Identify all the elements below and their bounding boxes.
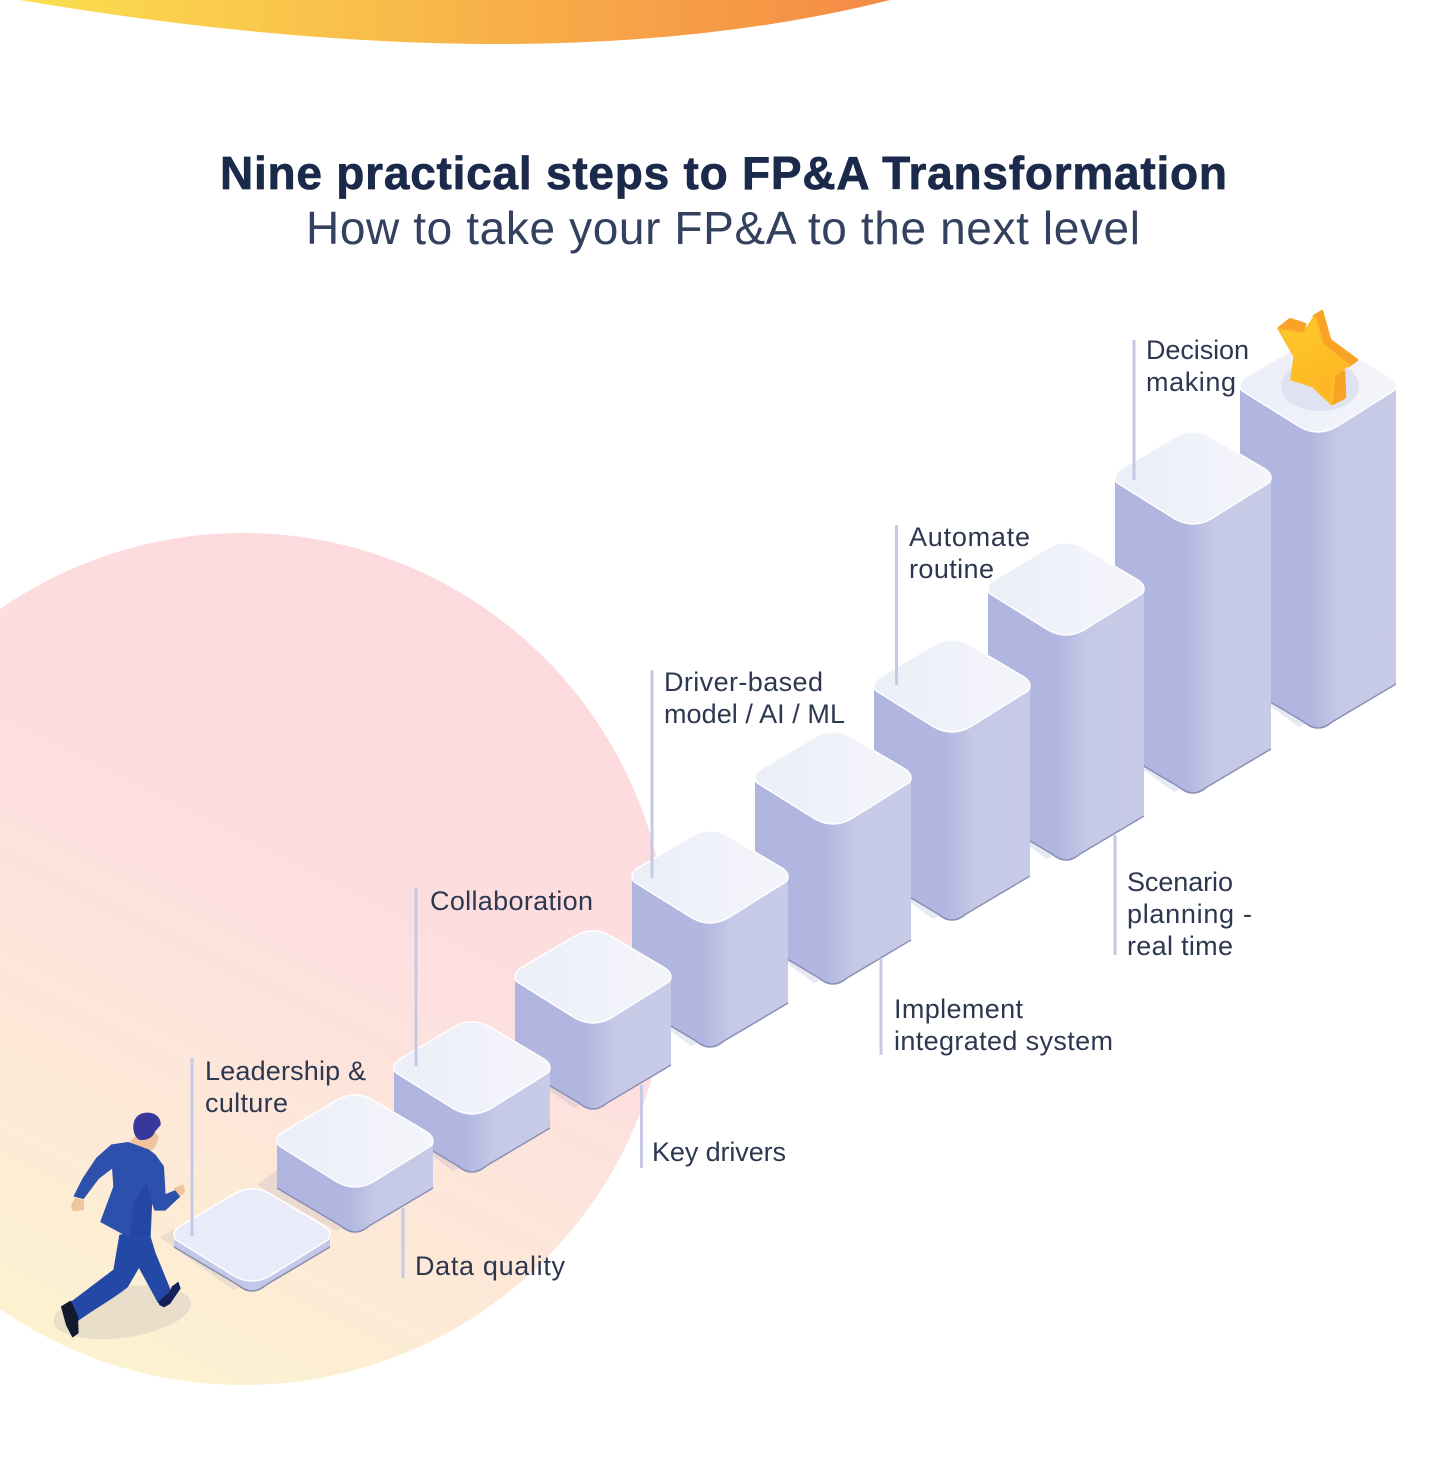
step block 9 xyxy=(1101,432,1271,793)
label: Driver-based model / AI / ML: model / AI / ML xyxy=(664,699,845,729)
label: Key drivers xyxy=(640,1085,786,1168)
label: Leadership & culture: Leadership & xyxy=(205,1056,366,1086)
label: Data quality: Data quality xyxy=(415,1251,566,1281)
step block 1 xyxy=(160,1189,330,1291)
icon: star on top block xyxy=(1279,311,1359,411)
label: Automate routine: Automate xyxy=(909,522,1030,552)
label: Driver-based model / AI / ML: Driver-based xyxy=(664,667,823,697)
label: Implement integrated system: integrated system xyxy=(894,1026,1113,1056)
title xyxy=(220,147,1227,254)
label: Decision making: making xyxy=(1146,367,1236,397)
label: Leadership & culture: culture xyxy=(205,1088,288,1118)
step block 8 xyxy=(974,543,1144,860)
label: Implement integrated system: Implement xyxy=(894,994,1023,1024)
label: Data quality xyxy=(402,1208,566,1281)
label: Scenario planning - real time: planning - xyxy=(1127,899,1252,929)
label: Decision making: Decision xyxy=(1146,335,1249,365)
label: Automate routine: routine xyxy=(909,554,994,584)
label: Driver-based model / AI / ML xyxy=(650,667,845,878)
title: How to take your FP&A to the next level xyxy=(306,202,1140,254)
label: Collaboration: Collaboration xyxy=(430,886,593,916)
step block 7 xyxy=(860,640,1030,920)
label: Key drivers: Key drivers xyxy=(652,1137,786,1167)
label: Leadership & culture xyxy=(190,1056,366,1236)
step block 4 xyxy=(501,931,671,1109)
icon: running businessman xyxy=(50,1113,195,1347)
step block 3 xyxy=(380,1022,550,1172)
label: Scenario planning - real time: Scenario xyxy=(1127,867,1233,897)
label: Scenario planning - real time xyxy=(1114,835,1252,961)
label: Decision making xyxy=(1132,335,1249,480)
label: Collaboration xyxy=(414,886,593,1066)
background gradient circle xyxy=(0,533,669,1385)
top gradient blob xyxy=(20,0,890,44)
label: Automate routine xyxy=(895,522,1030,685)
step block 2 xyxy=(257,1095,433,1232)
step block 6 xyxy=(741,732,911,984)
label: Scenario planning - real time: real time xyxy=(1127,931,1233,961)
step block 5 xyxy=(618,831,788,1047)
step block 10 xyxy=(1226,340,1396,728)
title: Nine practical steps to FP&A Transformation xyxy=(220,147,1227,199)
label: Implement integrated system xyxy=(880,958,1113,1056)
